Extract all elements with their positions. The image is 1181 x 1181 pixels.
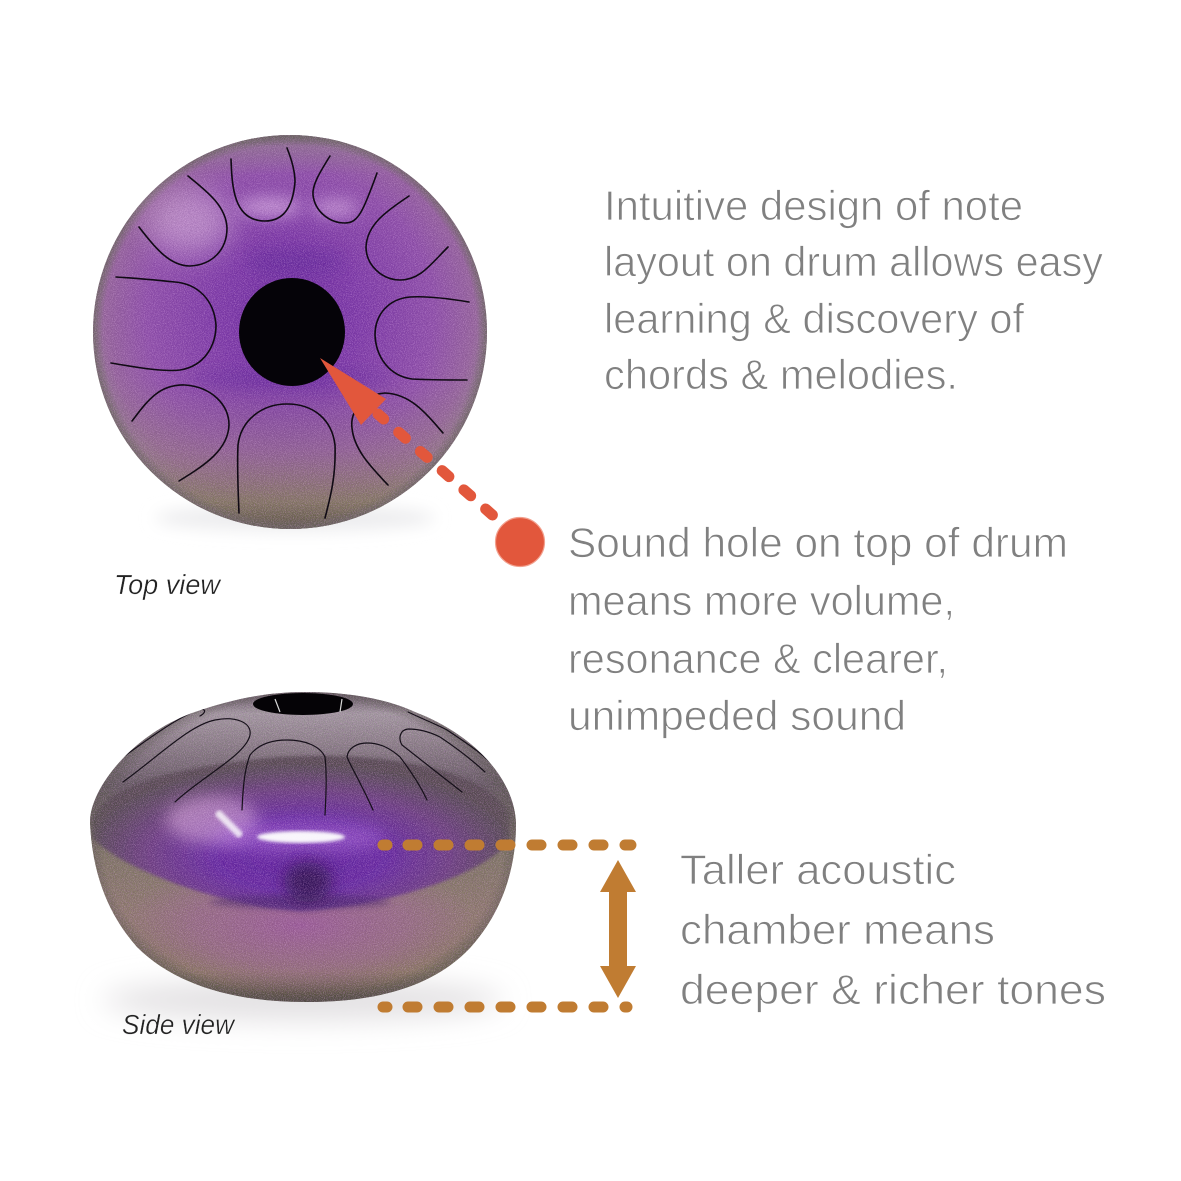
- sound hole: [239, 278, 345, 386]
- arrow: chamber height: [383, 845, 636, 1007]
- caption: side view: Side view: [122, 1009, 236, 1040]
- note tongues: [111, 148, 469, 518]
- text block: note layout: layout on drum allows easy: [604, 238, 1103, 285]
- text block: sound hole: unimpeded sound: [568, 692, 906, 739]
- side tongues: [112, 709, 490, 815]
- side sound hole: [253, 693, 353, 715]
- side drum photo: [85, 685, 525, 1020]
- text block: note layout: Intuitive design of note: [604, 182, 1023, 229]
- text block: sound hole: resonance & clearer,: [568, 635, 948, 682]
- text block: sound hole: means more volume,: [568, 577, 955, 624]
- text block: sound hole: Sound hole on top of drum: [568, 519, 1068, 566]
- caption: top view: Top view: [114, 569, 222, 600]
- arrow: sound hole pointer: [320, 358, 544, 566]
- text block: note layout: chords & melodies.: [604, 351, 958, 398]
- text block: note layout: learning & discovery of: [604, 295, 1024, 342]
- top drum photo: [90, 130, 490, 531]
- text block: acoustic chamber: deeper & richer tones: [680, 966, 1106, 1013]
- text block: acoustic chamber: Taller acoustic: [680, 846, 956, 893]
- text block: acoustic chamber: chamber means: [680, 906, 995, 953]
- text block: sound hole: [568, 519, 1068, 739]
- text block: note layout: [604, 182, 1103, 398]
- text block: acoustic chamber: [680, 846, 1106, 1013]
